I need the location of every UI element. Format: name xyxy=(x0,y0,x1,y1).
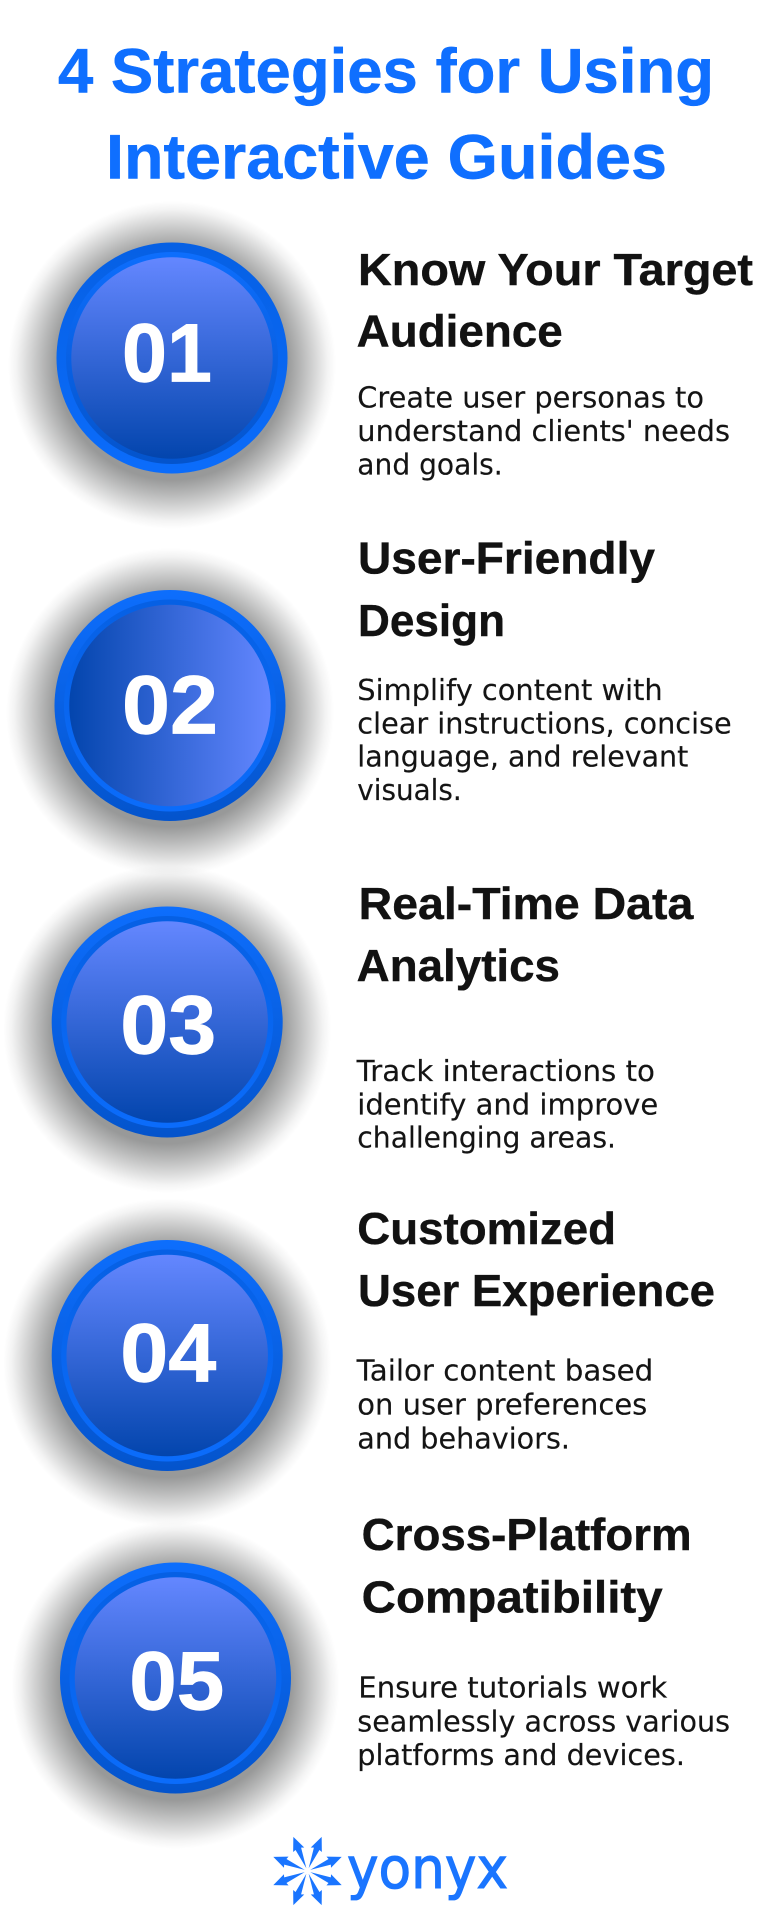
step 3 text: challenging areas. xyxy=(357,1121,616,1155)
step 2 text: clear instructions, concise xyxy=(357,706,732,740)
logo wordmark: yonyx xyxy=(347,1836,508,1902)
step 3 text: identify and improve xyxy=(357,1087,658,1121)
step 1 heading: Know Your Target xyxy=(358,244,753,295)
step 5 text: Ensure tutorials work xyxy=(358,1671,668,1705)
step 3 text: Track interactions to xyxy=(356,1054,655,1088)
step 2 text: Simplify content with xyxy=(357,673,663,707)
step 2 text: language, and relevant xyxy=(357,740,688,774)
step 3 badge xyxy=(3,865,331,1193)
step 5 heading xyxy=(362,1509,692,1622)
step 1 text: Create user personas to xyxy=(357,381,704,415)
step 2 text: visuals. xyxy=(357,773,462,807)
step 5 heading: Compatibility xyxy=(362,1571,663,1622)
step 2 text xyxy=(357,673,732,807)
step 3 heading xyxy=(357,878,694,991)
step 5 heading: Cross-Platform xyxy=(362,1509,692,1560)
title xyxy=(58,37,714,192)
title: Interactive Guides xyxy=(106,122,667,192)
step 3 heading: Real-Time Data xyxy=(359,878,694,929)
title: 4 Strategies for Using xyxy=(58,37,714,107)
step 3 heading: Analytics xyxy=(357,940,560,991)
step 2 badge xyxy=(6,548,334,876)
step 4 heading: User Experience xyxy=(358,1265,715,1316)
step 1 badge: 01 xyxy=(122,307,212,400)
logo: yonyx xyxy=(271,1835,508,1907)
step 4 text: Tailor content based xyxy=(356,1354,653,1388)
step 1 heading xyxy=(357,244,753,357)
step 2 heading xyxy=(358,532,655,646)
step 2 badge: 02 xyxy=(122,658,218,751)
step 2 heading: Design xyxy=(358,595,505,646)
step 1 heading: Audience xyxy=(357,306,563,357)
step 4 badge xyxy=(3,1198,331,1526)
step 2 heading: User-Friendly xyxy=(358,532,655,583)
step 4 heading xyxy=(357,1203,715,1316)
step 3 text xyxy=(356,1054,658,1155)
step 5 text xyxy=(357,1671,730,1772)
step 1 text: understand clients' needs xyxy=(357,414,730,448)
step 4 text: on user preferences xyxy=(357,1387,647,1421)
icon: radiating arrows xyxy=(271,1835,344,1907)
step 3 badge: 03 xyxy=(120,978,216,1071)
step 5 text: platforms and devices. xyxy=(357,1738,685,1772)
step 5 text: seamlessly across various xyxy=(357,1705,730,1739)
step 1 badge xyxy=(8,201,336,529)
step 4 text: and behaviors. xyxy=(357,1421,570,1455)
step 4 badge: 04 xyxy=(120,1307,216,1400)
step 4 text xyxy=(356,1354,653,1455)
step 5 badge xyxy=(12,1521,340,1849)
step 4 heading: Customized xyxy=(357,1203,616,1254)
step 5 badge: 05 xyxy=(129,1634,224,1727)
step 1 text: and goals. xyxy=(357,447,503,481)
step 1 text xyxy=(357,381,730,481)
